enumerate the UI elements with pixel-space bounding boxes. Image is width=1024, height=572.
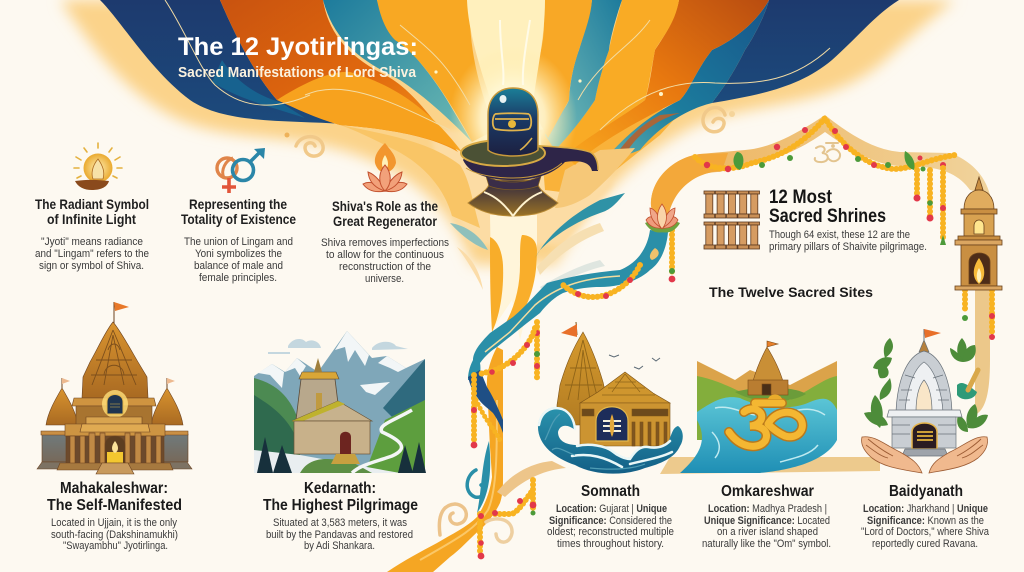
text: radiant symbol body: "Jyoti" means radiance bbox=[41, 236, 143, 248]
text: regenerator body: to allow for the continuous bbox=[326, 249, 444, 261]
text: Baidyanath body bbox=[861, 503, 990, 550]
text: Kedarnath body: Situated at 3,583 meters, it was bbox=[273, 517, 407, 529]
text: Somnath body: times throughout history. bbox=[557, 538, 664, 550]
text: Kedarnath body: built by the Pandavas and restored bbox=[266, 529, 413, 541]
text: Mahakaleshwar body: south-facing (Dakshinamukhi) bbox=[51, 529, 178, 541]
illustration: Omkareshwar river and om bbox=[680, 341, 837, 473]
lingam bbox=[461, 88, 598, 216]
text: Somnath body: Significance: Considered the bbox=[549, 515, 672, 527]
text: regenerator body bbox=[321, 237, 449, 285]
heading: totality of existence bbox=[181, 196, 296, 227]
text: Mahakaleshwar body: Located in Ujjain, it is the only bbox=[51, 517, 177, 529]
text: Somnath body bbox=[547, 503, 674, 550]
text: Somnath body: Location: Gujarat | Unique bbox=[556, 503, 667, 515]
central stream below lingam bbox=[387, 193, 668, 572]
heading: great regenerator: Shiva's Role as the bbox=[332, 198, 438, 214]
text: totality body: balance of male and bbox=[194, 260, 283, 272]
title bbox=[178, 33, 418, 81]
icon: radiant diya lamp bbox=[74, 143, 122, 190]
text: totality body: The union of Lingam and bbox=[184, 236, 293, 248]
heading: Kedarnath: The Highest Pilgrimage bbox=[263, 497, 418, 514]
heading: Somnath: Somnath bbox=[581, 483, 640, 500]
illustration: Kedarnath mountain scene bbox=[254, 331, 426, 473]
text: totality body: Yoni symbolizes the bbox=[195, 248, 282, 260]
heading: radiant symbol: of Infinite Light bbox=[47, 211, 136, 227]
heading: 12 most sacred shrines: Sacred Shrines bbox=[769, 206, 886, 227]
title: The 12 Jyotirlingas: bbox=[178, 33, 418, 61]
garland: arch bbox=[695, 118, 955, 172]
text: shrines body: Though 64 exist, these 12 are the bbox=[769, 229, 910, 241]
text: Somnath body: oldest; reconstructed multiple bbox=[547, 526, 674, 538]
heading: totality of existence: Totality of Existence bbox=[181, 211, 296, 227]
illustration: Mahakaleshwar temple bbox=[37, 302, 192, 474]
text: regenerator body: Shiva removes imperfections bbox=[321, 237, 449, 249]
lower swirls bbox=[439, 470, 512, 542]
connecting golden path bbox=[497, 115, 990, 497]
heading: great regenerator: Great Regenerator bbox=[333, 213, 437, 229]
text: Omkareshwar body: Unique Significance: Located bbox=[704, 515, 830, 527]
text: Kedarnath body: by Adi Shankara. bbox=[304, 540, 375, 552]
icon: om on arch bbox=[815, 143, 840, 162]
text: Kedarnath body bbox=[266, 517, 413, 552]
heading: Kedarnath bbox=[263, 480, 418, 514]
illustration: Baidyanath temple with healing hands bbox=[862, 329, 988, 473]
heading: Mahakaleshwar: Mahakaleshwar: bbox=[60, 480, 168, 497]
top flowing energy banner bbox=[60, 0, 955, 265]
icon: lingam and yoni symbols bbox=[217, 148, 265, 193]
icon: temple lamp tower bbox=[955, 177, 1002, 290]
text: shrines body: primary pillars of Shaivite pilgrimage. bbox=[769, 241, 927, 253]
icon: lotus with flame bbox=[363, 143, 407, 192]
heading: Omkareshwar: Omkareshwar bbox=[721, 483, 814, 500]
heading: twelve sacred sites: The Twelve Sacred Sites bbox=[709, 284, 873, 300]
text: shrines body bbox=[769, 229, 927, 253]
heading: radiant symbol: The Radiant Symbol bbox=[35, 196, 149, 212]
text: Baidyanath body: reportedly cured Ravana. bbox=[872, 538, 978, 550]
text: regenerator body: reconstruction of the bbox=[339, 261, 431, 273]
title: Sacred Manifestations of Lord Shiva bbox=[178, 64, 417, 81]
heading: Mahakaleshwar bbox=[47, 480, 182, 514]
illustration: Somnath temple and wave bbox=[538, 322, 683, 474]
text: totality body: female principles. bbox=[199, 272, 277, 284]
text: radiant symbol body: sign or symbol of Shiva. bbox=[39, 260, 144, 272]
text: Omkareshwar body: Location: Madhya Pradesh | bbox=[708, 503, 827, 515]
text: radiant symbol body: and "Lingam" refers to the bbox=[35, 248, 149, 260]
text: regenerator body: universe. bbox=[365, 273, 404, 285]
text: Baidyanath body: Significance: Known as the bbox=[867, 515, 984, 527]
garland: right hanging strands bbox=[914, 168, 995, 340]
text: Omkareshwar body bbox=[702, 503, 831, 550]
garland: left hanging strands bbox=[471, 230, 675, 559]
text: Omkareshwar body: naturally like the "Om" symbol. bbox=[702, 538, 831, 550]
text: Mahakaleshwar body: "Swayambhu" Jyotirlinga. bbox=[63, 540, 168, 552]
heading: Mahakaleshwar: The Self-Manifested bbox=[47, 497, 182, 514]
text: Baidyanath body: "Lord of Doctors," where Shiva bbox=[861, 526, 990, 538]
text: Omkareshwar body: on a river island shaped bbox=[717, 526, 818, 538]
icon: twelve pillars bbox=[704, 191, 760, 249]
text: Baidyanath body: Location: Jharkhand | Unique bbox=[863, 503, 988, 515]
text: radiant symbol body bbox=[35, 236, 149, 272]
heading: totality of existence: Representing the bbox=[189, 196, 287, 212]
heading: radiant symbol bbox=[35, 196, 149, 227]
text: Mahakaleshwar body bbox=[51, 517, 178, 552]
icon: lotus on path bbox=[645, 204, 680, 233]
heading: 12 most sacred shrines: 12 Most bbox=[769, 187, 833, 208]
heading: Kedarnath: Kedarnath: bbox=[304, 480, 376, 497]
text: totality body bbox=[184, 236, 293, 284]
heading: great regenerator bbox=[332, 198, 438, 229]
decorative swirls bbox=[284, 108, 735, 156]
heading: Baidyanath: Baidyanath bbox=[889, 483, 963, 500]
heading: 12 most sacred shrines bbox=[769, 187, 886, 227]
